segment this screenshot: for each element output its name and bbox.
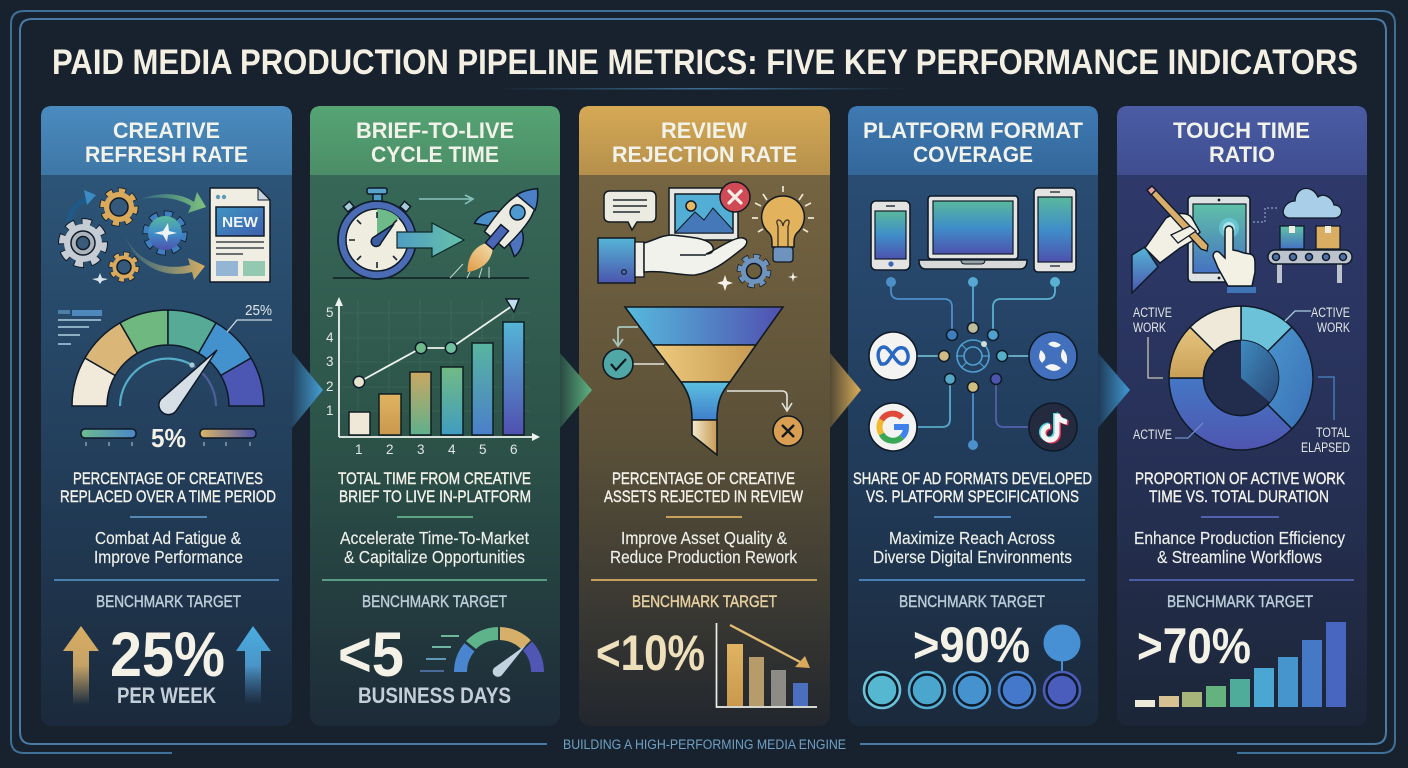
donut chart: touch time: TOTAL — [1316, 425, 1350, 440]
bar and line chart: cycle time: 3 — [326, 354, 334, 369]
bar and line chart: cycle time: 3 — [417, 442, 425, 457]
panel: review rejection rate — [579, 106, 830, 726]
heading: platform format coverage — [863, 118, 1084, 167]
bar and line chart: cycle time: 1 — [326, 403, 334, 418]
benefit text: & Capitalize Opportunities — [344, 547, 525, 567]
description — [60, 469, 276, 506]
bar and line chart: cycle time — [326, 297, 540, 457]
bar and line chart: cycle time: 4 — [326, 330, 334, 345]
benchmark target: <10% — [596, 625, 705, 681]
icon: devices — [871, 188, 1076, 272]
scale bars with 5 percent reading — [81, 423, 256, 453]
bar and line chart: cycle time: 6 — [510, 442, 518, 457]
heading: creative refresh rate: CREATIVE — [113, 118, 220, 143]
benefit text: & Streamline Workflows — [1157, 547, 1322, 567]
heading: review rejection rate: REVIEW — [661, 118, 747, 143]
donut chart: touch time: WORK — [1133, 320, 1166, 335]
donut chart: touch time: ELAPSED — [1301, 440, 1350, 455]
benchmark target: 25% — [110, 620, 225, 690]
benchmark target: PER WEEK — [117, 683, 216, 708]
benchmark target — [338, 593, 544, 708]
benchmark target: <5 — [338, 620, 404, 690]
benefit text — [610, 528, 797, 567]
gauge chart: refresh rate: 25% — [245, 302, 272, 319]
arrow: panel 2 to 3 — [560, 353, 592, 428]
description — [338, 469, 531, 506]
description: TIME VS. TOTAL DURATION — [1149, 487, 1329, 506]
heading: touch time ratio — [1173, 118, 1310, 167]
bar and line chart: cycle time: 1 — [355, 442, 363, 457]
description: REPLACED OVER A TIME PERIOD — [60, 487, 276, 506]
benchmark target: BENCHMARK TARGET — [899, 593, 1045, 611]
donut chart: touch time: ACTIVE — [1311, 305, 1350, 320]
heading: creative refresh rate — [85, 118, 248, 167]
heading: review rejection rate: REJECTION RATE — [612, 142, 797, 167]
panel: touch time ratio — [1117, 106, 1367, 726]
benefit text: Maximize Reach Across — [889, 528, 1055, 548]
bar and line chart: cycle time: 2 — [326, 379, 334, 394]
benefit text: Accelerate Time-To-Market — [340, 528, 529, 548]
panel: platform format coverage — [848, 106, 1098, 726]
benefit text — [873, 528, 1072, 567]
benefit text: Combat Ad Fatigue & — [95, 528, 241, 548]
gauge chart: refresh rate — [58, 302, 272, 415]
benefit text — [94, 528, 243, 567]
benchmark target: >90% — [913, 617, 1030, 673]
arrow: panel 1 to 2 — [292, 352, 323, 428]
heading: platform format coverage: PLATFORM FORMAT — [863, 118, 1084, 143]
icon: gears to new creative: NEW — [222, 214, 259, 231]
heading: brief-to-live cycle time — [356, 118, 514, 167]
panel: brief-to-live cycle time — [310, 106, 560, 726]
donut chart: touch time: ACTIVE — [1133, 427, 1172, 442]
donut chart: touch time: WORK — [1317, 320, 1350, 335]
description: SHARE OF AD FORMATS DEVELOPED — [853, 469, 1092, 488]
arrow: panel 4 to 5 — [1098, 353, 1130, 428]
heading: brief-to-live cycle time: CYCLE TIME — [371, 142, 499, 167]
benchmark target: BENCHMARK TARGET — [1167, 593, 1313, 611]
benchmark target: BENCHMARK TARGET — [96, 593, 241, 611]
benefit text — [1134, 528, 1345, 567]
footer tagline: BUILDING A HIGH-PERFORMING MEDIA ENGINE — [563, 737, 846, 752]
description: PERCENTAGE OF CREATIVE — [612, 469, 795, 488]
icon: platform logos — [869, 332, 1077, 451]
icon: gears to new creative — [63, 188, 270, 284]
benefit text: Enhance Production Efficiency — [1134, 528, 1345, 548]
scale bars with 5 percent reading: 5% — [151, 423, 186, 453]
benchmark target — [864, 593, 1080, 708]
benefit text — [340, 528, 529, 567]
icon: creative review hand — [598, 182, 814, 291]
description — [604, 469, 803, 506]
icon: stopwatch to rocket — [333, 172, 558, 289]
description: PROPORTION OF ACTIVE WORK — [1135, 469, 1346, 488]
benchmark target: BENCHMARK TARGET — [632, 593, 777, 611]
benchmark target — [596, 593, 817, 707]
heading: brief-to-live cycle time: BRIEF-TO-LIVE — [356, 118, 514, 143]
heading: touch time ratio: RATIO — [1209, 142, 1275, 167]
heading: touch time ratio: TOUCH TIME — [1173, 118, 1310, 143]
benchmark target — [1135, 593, 1346, 707]
description: VS. PLATFORM SPECIFICATIONS — [866, 487, 1079, 506]
heading: creative refresh rate: REFRESH RATE — [85, 142, 248, 167]
description: PERCENTAGE OF CREATIVES — [73, 469, 263, 488]
panel: creative refresh rate — [41, 106, 292, 726]
bar and line chart: cycle time: 4 — [448, 442, 456, 457]
benchmark target: >70% — [1137, 618, 1251, 674]
benefit text: Improve Performance — [94, 547, 243, 567]
description — [853, 469, 1092, 506]
benchmark target: BENCHMARK TARGET — [362, 593, 507, 611]
description — [1135, 469, 1346, 506]
network connector diagram — [886, 277, 1060, 450]
arrow: panel 3 to 4 — [830, 353, 861, 428]
bar and line chart: cycle time: 2 — [386, 442, 394, 457]
donut chart: touch time: ACTIVE — [1133, 305, 1172, 320]
description: TOTAL TIME FROM CREATIVE — [338, 469, 531, 488]
heading: platform format coverage: COVERAGE — [913, 142, 1033, 167]
donut chart: touch time — [1133, 305, 1350, 455]
benefit text: Reduce Production Rework — [610, 547, 797, 567]
benchmark target: BUSINESS DAYS — [358, 683, 511, 708]
benchmark target — [63, 593, 271, 708]
bar and line chart: cycle time: 5 — [479, 442, 487, 457]
heading: review rejection rate — [612, 118, 797, 167]
description: ASSETS REJECTED IN REVIEW — [604, 487, 803, 506]
benefit text: Diverse Digital Environments — [873, 547, 1072, 567]
funnel chart — [603, 307, 803, 455]
icon: hands, tablet and conveyor — [1132, 186, 1352, 293]
description: BRIEF TO LIVE IN-PLATFORM — [339, 487, 531, 506]
benefit text: Improve Asset Quality & — [621, 528, 787, 548]
bar and line chart: cycle time: 5 — [326, 305, 334, 320]
